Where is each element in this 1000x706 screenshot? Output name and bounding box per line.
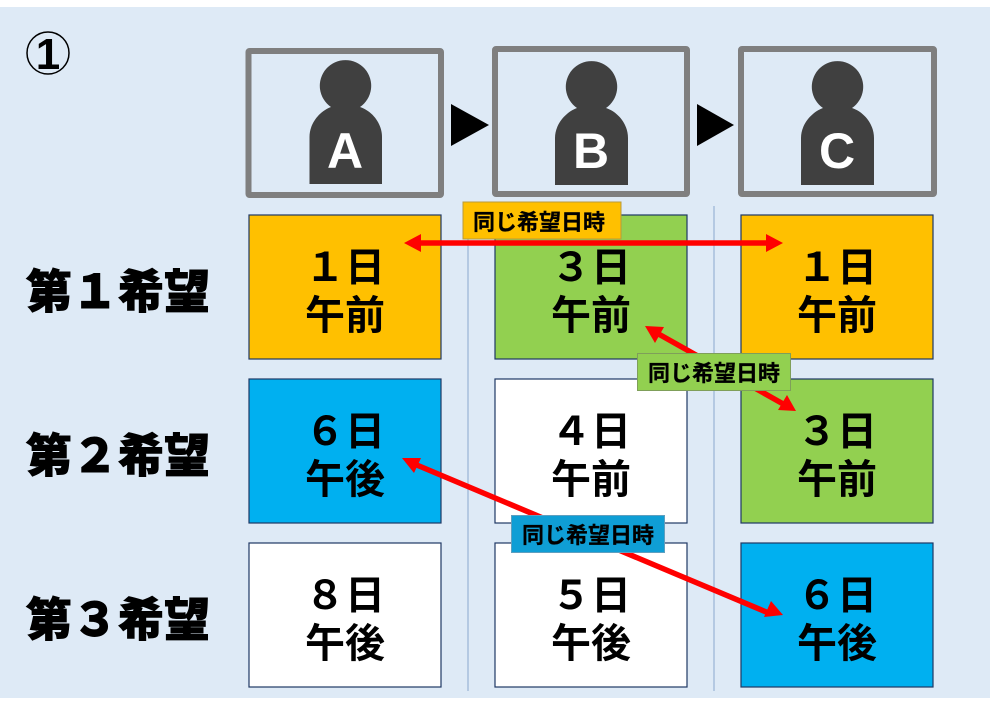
cell C1 bbox=[741, 215, 933, 359]
arrow: A1 to C1 bbox=[404, 234, 783, 252]
cell B2: 午前 bbox=[551, 458, 631, 502]
person box A bbox=[248, 51, 441, 195]
cell B1 bbox=[495, 215, 687, 359]
tag: orange same date bbox=[463, 202, 621, 239]
row label: third choice: 第３希望 bbox=[26, 594, 210, 646]
person box C: C bbox=[819, 123, 855, 179]
cell A3: ８日 bbox=[305, 574, 385, 618]
cell B3: 午後 bbox=[551, 622, 631, 666]
arrow: B1 to C2 bbox=[645, 326, 796, 411]
divider lines bbox=[468, 206, 714, 691]
number marker bbox=[27, 30, 69, 79]
cell B1: 午前 bbox=[551, 294, 631, 338]
cell A2 bbox=[249, 379, 441, 523]
cell A2: ６日 bbox=[305, 410, 385, 454]
person box A: A bbox=[327, 123, 363, 179]
row label: second choice: 第２希望 bbox=[26, 430, 210, 482]
tag: orange same date: 同じ希望日時 bbox=[473, 210, 605, 235]
cell A3: 午後 bbox=[305, 622, 385, 666]
person box C bbox=[741, 49, 934, 194]
arrowhead A to B bbox=[451, 104, 489, 146]
cell A1: １日 bbox=[305, 246, 385, 290]
cell C3: ６日 bbox=[797, 574, 877, 618]
cell C3: 午後 bbox=[797, 622, 877, 666]
cell B2: ４日 bbox=[551, 410, 631, 454]
arrowhead B to C bbox=[697, 104, 734, 146]
number marker: 1 bbox=[36, 30, 60, 79]
cell C1: １日 bbox=[797, 246, 877, 290]
cell B3: ５日 bbox=[551, 574, 631, 618]
tag: blue same date bbox=[512, 516, 664, 552]
row label: first choice: 第１希望 bbox=[26, 266, 210, 318]
cell B3 bbox=[495, 543, 687, 687]
cell A1: 午前 bbox=[305, 294, 385, 338]
cell A1 bbox=[249, 215, 441, 359]
cell B1: ３日 bbox=[551, 246, 631, 290]
cell C1: 午前 bbox=[797, 294, 877, 338]
person box B bbox=[495, 49, 687, 194]
cell C3 bbox=[741, 543, 933, 687]
cell C2: 午前 bbox=[797, 458, 877, 502]
cell A3 bbox=[249, 543, 441, 687]
cell B2 bbox=[495, 379, 687, 523]
cell C2: ３日 bbox=[797, 410, 877, 454]
arrow: A2 to C3 bbox=[402, 458, 783, 617]
cell C2 bbox=[741, 379, 933, 523]
person box B: B bbox=[573, 123, 609, 179]
tag: blue same date: 同じ希望日時 bbox=[522, 523, 654, 548]
cell A2: 午後 bbox=[305, 458, 385, 502]
tag: green same date: 同じ希望日時 bbox=[648, 361, 780, 386]
tag: green same date bbox=[638, 354, 790, 390]
